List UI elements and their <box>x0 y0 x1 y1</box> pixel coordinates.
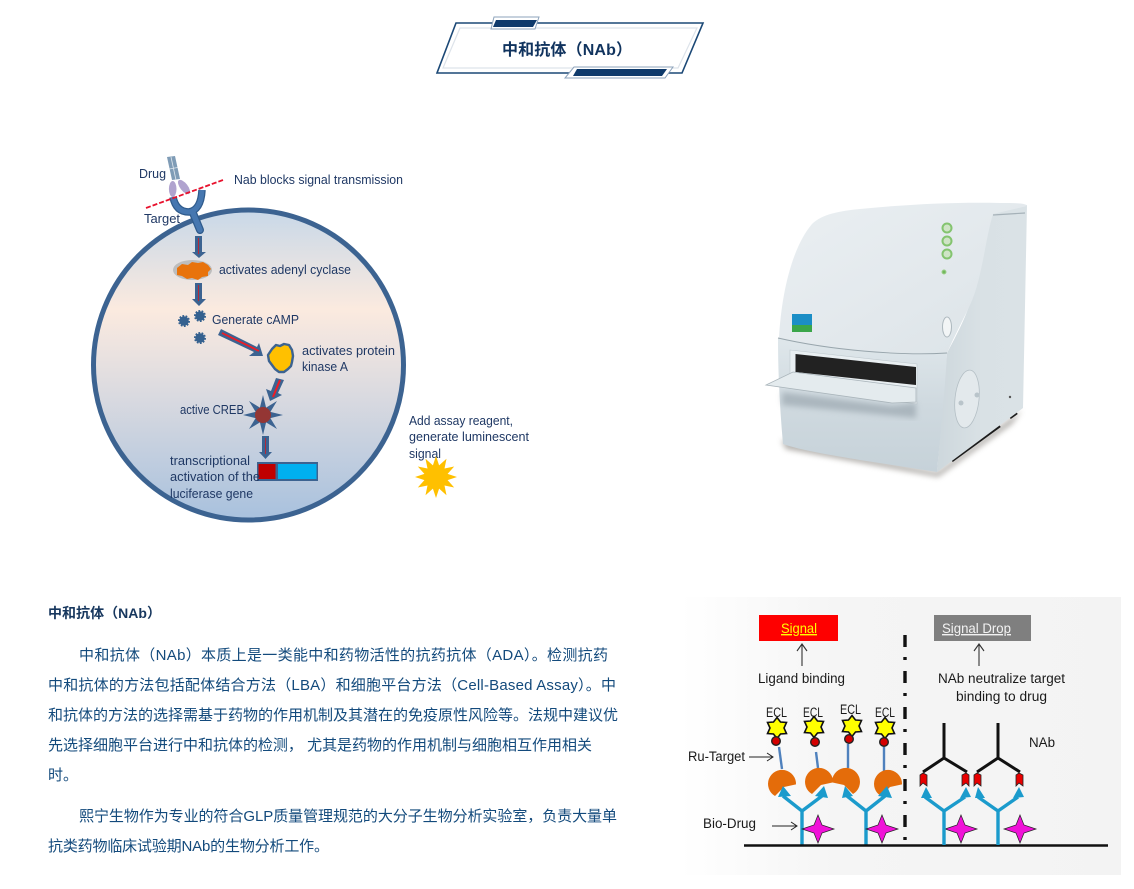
signal drop box <box>934 615 1031 641</box>
cell circle <box>94 210 404 520</box>
arrow: to adenyl cyclase <box>192 236 206 258</box>
text block: NAb description: 中和抗体（NAb）本质上是一类能中和药物活性的抗药抗体（ADA）。检测抗药 <box>79 647 608 664</box>
neutralizing antibodies <box>920 723 1023 786</box>
arrow: to CREB <box>266 378 284 401</box>
text block: NAb description <box>48 647 618 784</box>
text block: NAb description: 先选择细胞平台进行中和抗体的检测， 尤其是药物的作用机制与细胞相互作用相关 <box>48 737 592 754</box>
label: NAb neutralize target binding to drug <box>938 671 1065 704</box>
label: transcriptional activation: activation of the <box>170 469 260 484</box>
icons: cAMP molecules <box>179 311 205 343</box>
label: transcriptional activation: luciferase gene <box>170 486 253 501</box>
label: Target: Target <box>144 211 180 226</box>
label: Ru-Target: Ru-Target <box>688 749 745 764</box>
icon: adenyl cyclase <box>173 260 212 280</box>
ECL stars <box>768 716 894 738</box>
signal box: Signal <box>781 620 817 636</box>
icon: luminescent signal burst <box>415 456 457 498</box>
label: activates protein kinase A <box>302 343 395 374</box>
label: Bio-Drug: Bio-Drug <box>703 816 756 831</box>
text block: laboratory capability: 熙宁生物作为专业的符合GLP质量管理规范的大分子生物分析实验室，负责大量单 <box>79 808 617 825</box>
instrument logo <box>792 314 812 332</box>
bio-drug antibodies left <box>778 786 892 845</box>
label: transcriptional activation <box>170 453 260 501</box>
label: active CREB: active CREB <box>180 402 244 417</box>
label: add assay reagent: signal <box>409 446 441 461</box>
lid handle recess <box>942 317 952 337</box>
icon: protein kinase A <box>268 344 293 372</box>
label: add assay reagent: Add assay reagent, <box>409 413 513 428</box>
text block: NAb description: 中和抗体的方法包括配体结合方法（LBA）和细胞平台方法（Cell-Based Assay）。中 <box>48 677 616 694</box>
instrument feet <box>952 413 1017 461</box>
label: activates protein kinase A: activates protein <box>302 343 395 358</box>
dash-dot divider <box>903 635 907 842</box>
plate tray <box>766 372 916 403</box>
label: NAb neutralize target binding to drug: NAb neutralize target <box>938 671 1065 686</box>
diagram: signal pathway in a cell <box>94 156 529 520</box>
ECL labels: ECL <box>875 705 895 720</box>
arrow: to cAMP <box>192 283 206 306</box>
title banner <box>437 17 703 78</box>
label: transcriptional activation: transcriptional <box>170 453 250 468</box>
ECL labels: ECL <box>766 705 787 720</box>
orange target molecules <box>768 768 902 796</box>
text block: NAb description: 和抗体的方法的选择需基于药物的作用机制及其潜在的免疫原性风险等。法规中建议优 <box>48 706 618 724</box>
status buttons <box>942 224 952 274</box>
panel: NAb ECL assay schematic <box>680 597 1121 875</box>
red dashed blocking line <box>146 180 223 208</box>
image: plate reader instrument <box>766 203 1027 477</box>
arrow: neutralize to signal drop <box>974 644 984 666</box>
side round cover <box>952 369 1011 429</box>
title text: 中和抗体（NAb） <box>502 40 632 59</box>
ECL labels: ECL <box>840 702 861 717</box>
text block: laboratory capability: 抗类药物临床试验期NAb的生物分析工作。 <box>48 838 329 855</box>
heading: 中和抗体（NAb）: 中和抗体（NAb） <box>48 605 161 621</box>
baseline <box>744 844 1108 847</box>
icon: target receptor <box>173 190 202 230</box>
icon: luciferase gene bar <box>257 462 318 481</box>
label: activates adenyl cyclase: activates adenyl cyclase <box>219 262 351 277</box>
signal drop box: Signal Drop <box>942 620 1011 636</box>
side panel <box>937 203 1027 472</box>
label: Ru-Target <box>688 749 773 764</box>
text block: laboratory capability <box>48 808 617 855</box>
arrow: ligand to signal <box>797 644 807 666</box>
arrow: to protein kinase <box>218 329 263 356</box>
label: Drug: Drug <box>139 166 166 181</box>
label: NAb neutralize target binding to drug: binding to drug <box>956 689 1047 704</box>
label: activates protein kinase A: kinase A <box>302 359 348 374</box>
label: Ligand binding: Ligand binding <box>758 671 845 686</box>
icon: drug antibody <box>167 156 192 197</box>
front lower body <box>778 338 947 472</box>
label: add assay reagent: generate luminescent <box>409 429 529 444</box>
ECL labels: ECL <box>803 705 823 720</box>
lid <box>779 203 1027 354</box>
label: NAb: NAb <box>1029 735 1055 750</box>
label: Generate cAMP: Generate cAMP <box>212 312 299 327</box>
icon: active CREB <box>243 395 283 435</box>
reading slot <box>790 350 917 404</box>
label: Bio-Drug <box>703 816 797 831</box>
label: Nab blocks signal transmission: Nab blocks signal transmission <box>234 172 403 187</box>
text block: NAb description: 时。 <box>48 767 78 784</box>
Ru-target linkers <box>779 744 884 773</box>
ECL labels <box>766 702 895 720</box>
label: add assay reagent <box>409 413 529 461</box>
signal box <box>759 615 838 641</box>
ruthenium labels <box>772 735 888 746</box>
arrow: to gene <box>259 436 272 459</box>
magenta stars <box>802 815 1036 843</box>
bio-drug antibodies right <box>921 787 1024 845</box>
tray shadow <box>782 392 916 418</box>
